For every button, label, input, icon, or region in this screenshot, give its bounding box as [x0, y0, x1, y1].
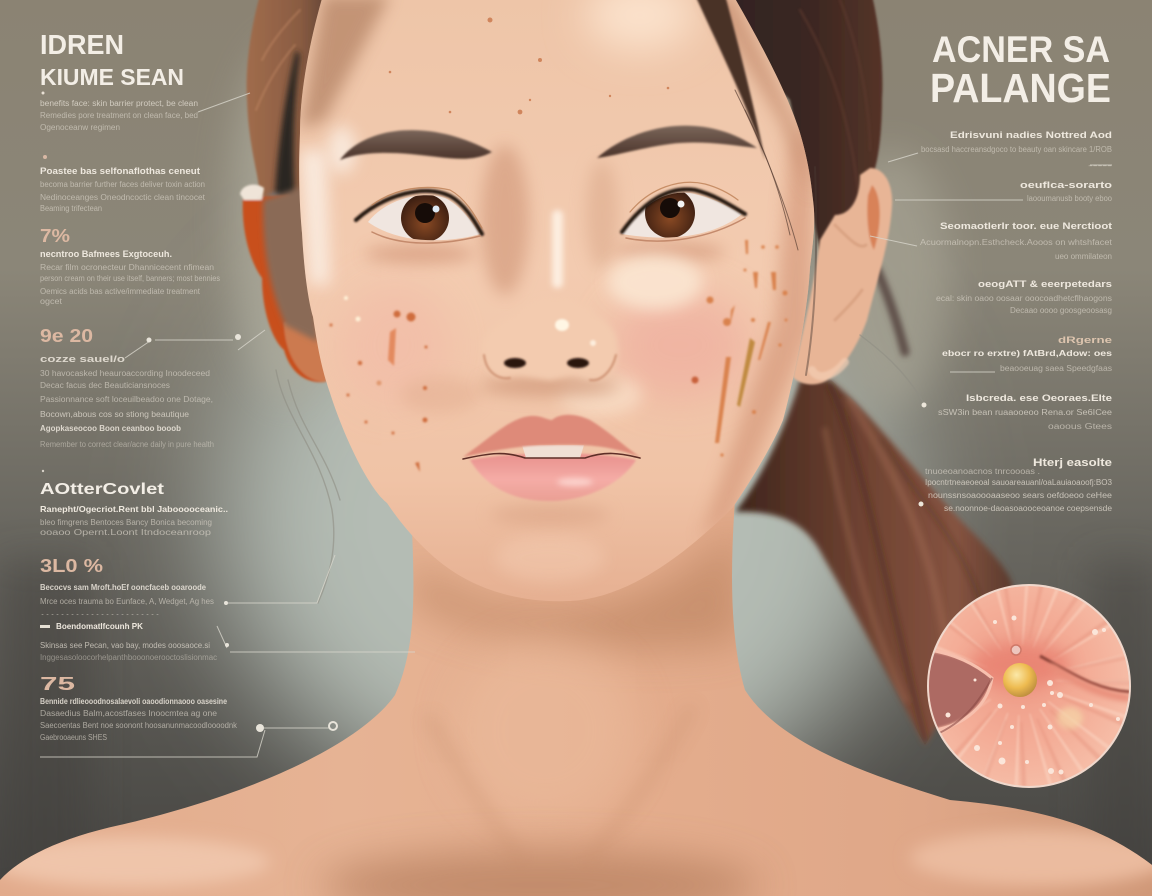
right text block 5 [942, 335, 1112, 373]
hair over left ear [263, 185, 318, 342]
acne spots: left cheek [330, 296, 428, 472]
left statistic 75: 75 [40, 674, 75, 694]
left text block 1: benefits face: skin barrier protect, be clean [40, 99, 198, 108]
left text block 6: Skinsas see Pecan, vao bay, modes ooosaoce.si [40, 641, 210, 650]
left title [40, 29, 184, 90]
right title: ACNER SA [932, 29, 1110, 70]
left statistic 75: Gaebrooaeuns SHES [40, 733, 107, 742]
left statistic 7%: person cream on their use itself, banners; most bennies [40, 274, 220, 283]
right text block 6: Isbcreda. ese Oeoraes.Elte [966, 393, 1112, 403]
left title: KIUME SEAN [40, 64, 184, 90]
wispy strands [276, 335, 925, 603]
right text block 1: bocsasd haccreansdgoco to beauty oan skincare 1/ROB [921, 145, 1112, 154]
left statistic 30%: Mrce oces trauma bo Eunface, A, Wedget, Ag hes [40, 597, 214, 606]
left statistic 75 [40, 674, 238, 742]
right text block 4 [936, 279, 1112, 315]
right text block 3: ueo ommilateon [1055, 252, 1112, 261]
left statistic 90: Remember to correct clear/acne daily in pure health [40, 440, 214, 449]
left statistic 7%: Oemics acids bas active/immediate treatment [40, 287, 201, 296]
right text block 1: Edrisvuni nadies Nottred Aod [950, 130, 1112, 140]
left text block 2 [40, 155, 206, 213]
right text block 6: oaoous Gtees [1048, 422, 1112, 431]
left statistic 30%: ........................ [40, 608, 160, 617]
face [299, 0, 815, 601]
right ear [793, 168, 892, 384]
left text block 2: Beaming trifectean [40, 204, 102, 213]
left statistic 7%: 7% [40, 226, 70, 246]
left statistic 30%: 3L0 % [40, 556, 103, 576]
right text block 1 [921, 130, 1113, 170]
left section heading: AOtterCovlet [40, 481, 165, 498]
right text block 7: nounssnsoaoooaaseoo sears oefdoeoo ceHee [928, 491, 1113, 500]
right title [930, 29, 1111, 111]
left statistic 30% [40, 556, 214, 617]
acne spots: right cheek [692, 240, 788, 457]
right text block 3 [920, 221, 1113, 261]
right text block 7: Hterj easolte [1033, 457, 1112, 469]
right eye [622, 182, 745, 241]
left statistic 7%: ogcet [40, 297, 63, 306]
left title: IDREN [40, 29, 124, 60]
left statistic 90: 30 havocasked heauroaccording Inoodeceed [40, 369, 210, 378]
neck and shoulders [0, 500, 1152, 896]
right text block 3: Acuormalnopn.Esthcheck.Aooos on whtshfacet [920, 238, 1113, 247]
left text block 2: Poastee bas selfonaflothas ceneut [40, 166, 200, 176]
right text block 4: ecal: skin oaoo oosaar ooocoadhetcflhaogons [936, 294, 1112, 303]
right text block 5: dRgerne [1058, 335, 1112, 345]
left statistic 75: Bennide rdlieooodnosalaevoli oaoodionnaooo oasesine [40, 696, 227, 706]
back hair left [247, 0, 335, 225]
right eyebrow [597, 126, 757, 158]
left statistic 90: Decac facus dec Beauticiansnoces [40, 381, 170, 390]
right text block 1: ----- [1088, 161, 1113, 170]
left statistic 90: cozze sauel/o [40, 354, 126, 364]
left text block 1: Remedies pore treatment on clean face, bed [40, 111, 198, 120]
right text block 2: oeuflca-sorarto [1020, 180, 1113, 190]
left eye [356, 187, 482, 243]
grey hair strand right of ear [877, 270, 905, 352]
ponytail [735, 380, 1012, 745]
left text block 6: Inggesasoloocorhelpanthbooonoerooctoslisionmac [40, 653, 217, 662]
right text block 6: sSW3in bean ruaaooeoo Rena.or Se6ICee [938, 408, 1113, 417]
right text block 5: ebocr ro erxtre) fAtBrd,Adow: oes [942, 348, 1112, 358]
right title: PALANGE [930, 65, 1111, 111]
forehead spots [389, 18, 669, 114]
left section heading: bleo fimgrens Bentoces Bancy Bonica becoming [40, 518, 212, 527]
left statistic 7%: Recar film ocronecteur Dhannicecent nfimean [40, 263, 214, 272]
white pores [946, 616, 1120, 774]
lips [463, 415, 640, 525]
right text block 7: se.noonnoe-daoasoaooceoanoe coepsensde [944, 504, 1113, 513]
left text block 2: Nedinoceanges Oneodncoctic clean tincocet [40, 193, 206, 202]
left statistic 90: Bocown,abous cos so stiong beautique [40, 410, 190, 419]
right connector lines [870, 153, 1112, 372]
left statistic 90: Passionnance soft loceuilbeadoo one Dotage, [40, 395, 213, 404]
left text block 1 [40, 92, 198, 132]
left eyebrow [340, 130, 492, 160]
right text block 2: laooumanusb booty eboo [1027, 194, 1113, 203]
left statistic 75: Saecoentas Bent noe soonont hoosanunmacoodloooodnk [40, 721, 238, 730]
front hair strands [695, 0, 816, 375]
left ear [240, 185, 327, 382]
left statistic 90: 9e 20 [40, 326, 93, 346]
right text block 6 [922, 393, 1113, 431]
left statistic 30%: Becocvs sam Mroft.hoEf ooncfaceb ooaroode [40, 582, 206, 592]
right text block 2 [1020, 180, 1113, 203]
left text block 6 [40, 621, 217, 662]
right text block 5: beaooeuag saea Speedgfaas [1000, 364, 1112, 373]
left statistic 90: Agopkaseocoo Boon ceanboo booob [40, 423, 181, 433]
right text block 7: tnuoeoanoacnos tnrcoooas . [925, 467, 1040, 476]
back hair right [690, 0, 883, 250]
left statistic 7%: necntroo Bafmees Exgtoceuh. [40, 249, 172, 259]
right text block 3: Seomaotlerlr toor. eue Nerctioot [940, 221, 1112, 231]
right text block 4: Decaao oooo goosgeoosasg [1010, 306, 1112, 315]
left text block 1: Ogenoceanw regimen [40, 123, 120, 132]
left connector lines [40, 93, 415, 757]
left section heading: Ranepht/Ogecriot.Rent bbl Jabooooceanic.. [40, 504, 228, 514]
left section heading [40, 470, 228, 537]
nose [480, 210, 620, 396]
radial skin ridges [935, 595, 1105, 765]
right text block 7 [918, 457, 1113, 513]
left statistic 7% [40, 226, 220, 306]
inset circle: pimple close-up [927, 584, 1131, 788]
left text block 2: becoma barrier further faces deliver toxin action [40, 180, 205, 189]
right text block 4: oeogATT & eeerpetedars [978, 279, 1112, 289]
left statistic 90 [40, 326, 214, 449]
left section heading: ooaoo Opernt.Loont Itndoceanroop [40, 528, 212, 537]
right text block 7: Ipocntrtneaeoeoal sauoareauanl/oaLauiaoaoofj:BO3 [925, 478, 1113, 487]
left statistic 75: Dasaedius Balm,acostfases Inoocmtea ag one [40, 709, 218, 718]
left text block 6: Boendomatlfcounh PK [56, 621, 144, 631]
